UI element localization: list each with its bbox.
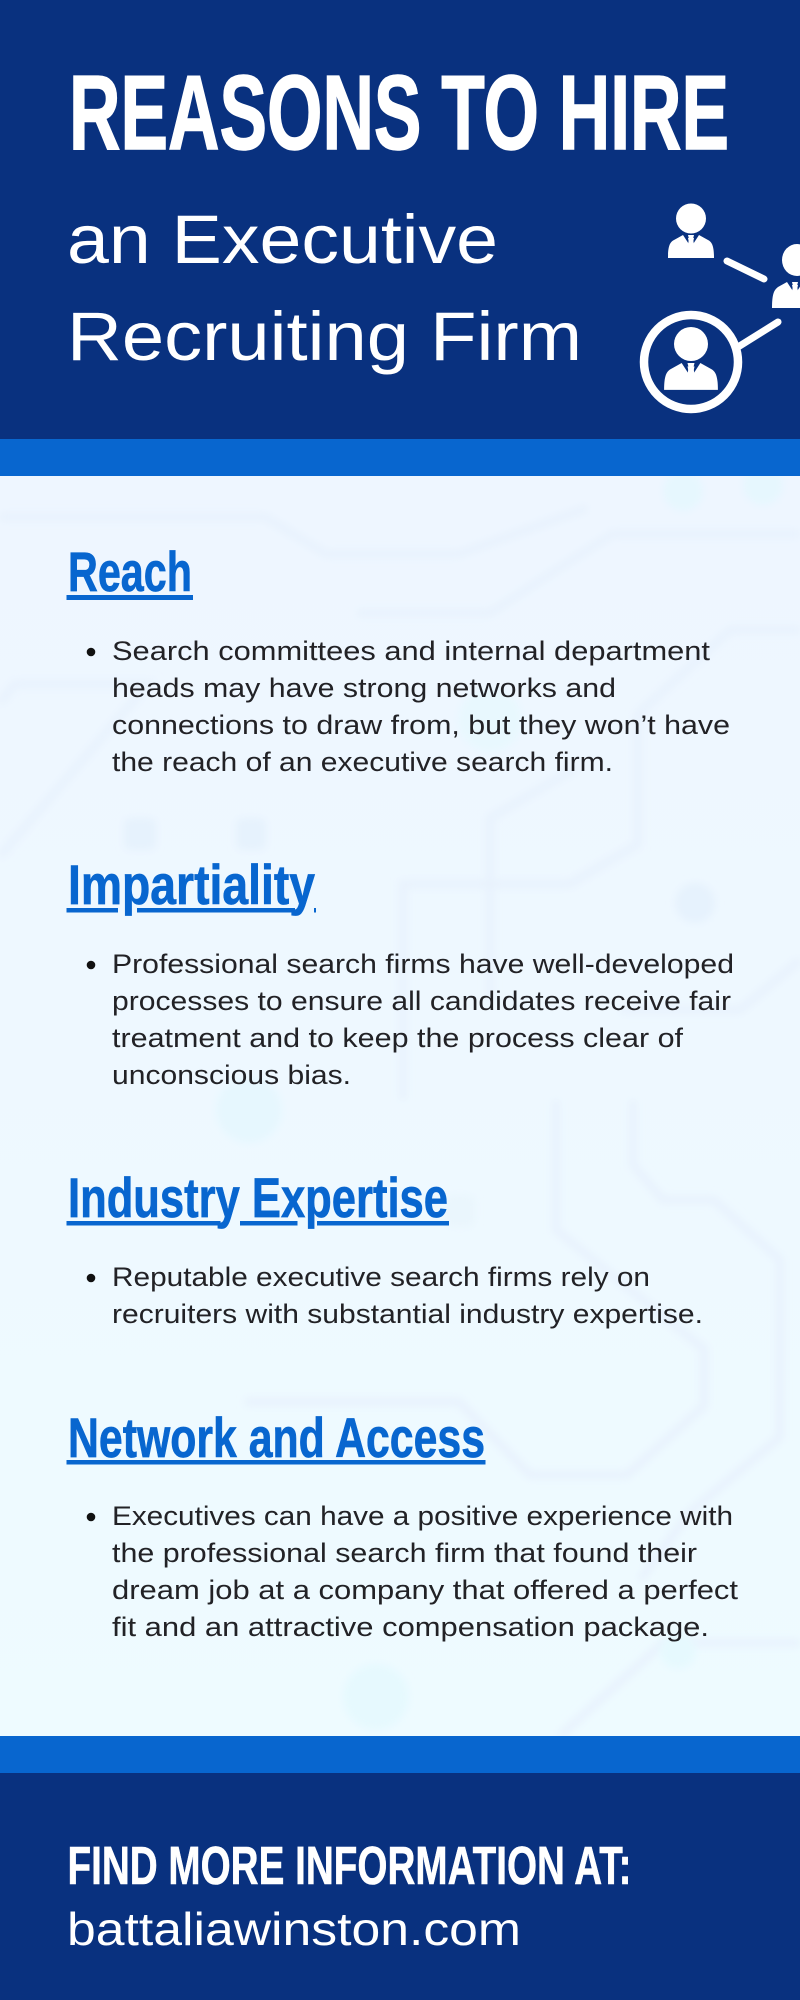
heading: reach: Reach: [68, 540, 192, 603]
bullet text: reach: heads may have strong networks and: [112, 673, 616, 703]
icon: magnifier handle: [738, 322, 778, 347]
band: top accent: [0, 439, 800, 476]
subtitle: an Executive: [67, 201, 498, 278]
footer url: battaliawinston.com: [67, 1903, 521, 1955]
bullet text: impartiality: Professional search firms have well-developed: [112, 949, 734, 979]
bullet text: impartiality: unconscious bias.: [112, 1060, 351, 1090]
bullet text: network and access: Executives can have a positive experience with: [112, 1501, 733, 1531]
heading: industry expertise: Industry Expertise: [68, 1166, 448, 1229]
band: bottom accent: [0, 1736, 800, 1773]
icon: magnifier ring: [644, 315, 738, 409]
bullet text: network and access: [87, 1501, 739, 1642]
section: network and access: [66, 1406, 739, 1642]
bullet text: reach: Search committees and internal department: [112, 636, 711, 666]
panel: content background: [0, 465, 800, 1736]
bullet text: impartiality: processes to ensure all candidates receive fair: [112, 986, 731, 1016]
heading: impartiality: Impartiality: [68, 853, 315, 916]
panel: header background: [0, 0, 800, 439]
bullet text: industry expertise: Reputable executive search firms rely on: [112, 1262, 650, 1292]
bullet text: reach: connections to draw from, but they won’t have: [112, 710, 730, 740]
panel: footer background: [0, 1773, 800, 2000]
icon: person right: [772, 244, 800, 308]
bullet text: impartiality: treatment and to keep the process clear of: [112, 1023, 684, 1053]
bullet text: impartiality: [87, 949, 734, 1090]
section: industry expertise: [66, 1166, 703, 1329]
title: [67, 54, 729, 375]
bullet text: network and access: fit and an attractive compensation package.: [112, 1612, 709, 1642]
bullet text: network and access: the professional search firm that found their: [112, 1538, 697, 1568]
subtitle: [67, 201, 582, 375]
bullet text: reach: [87, 636, 730, 777]
bullet text: industry expertise: recruiters with substantial industry expertise.: [112, 1299, 703, 1329]
heading: network and access: Network and Access: [68, 1406, 485, 1469]
icon: person in magnifier: [664, 327, 718, 390]
subtitle: Recruiting Firm: [67, 298, 582, 375]
icon: person top: [668, 204, 714, 258]
section: reach: [66, 540, 730, 777]
bullet text: reach: the reach of an executive search firm.: [112, 747, 613, 777]
bullet text: industry expertise: [87, 1262, 703, 1329]
section: impartiality: [66, 853, 734, 1090]
bullet text: network and access: dream job at a company that offered a perfect: [112, 1575, 739, 1605]
icon: recruiting network with magnifier: [644, 204, 800, 409]
icon: connector line: [727, 261, 764, 279]
